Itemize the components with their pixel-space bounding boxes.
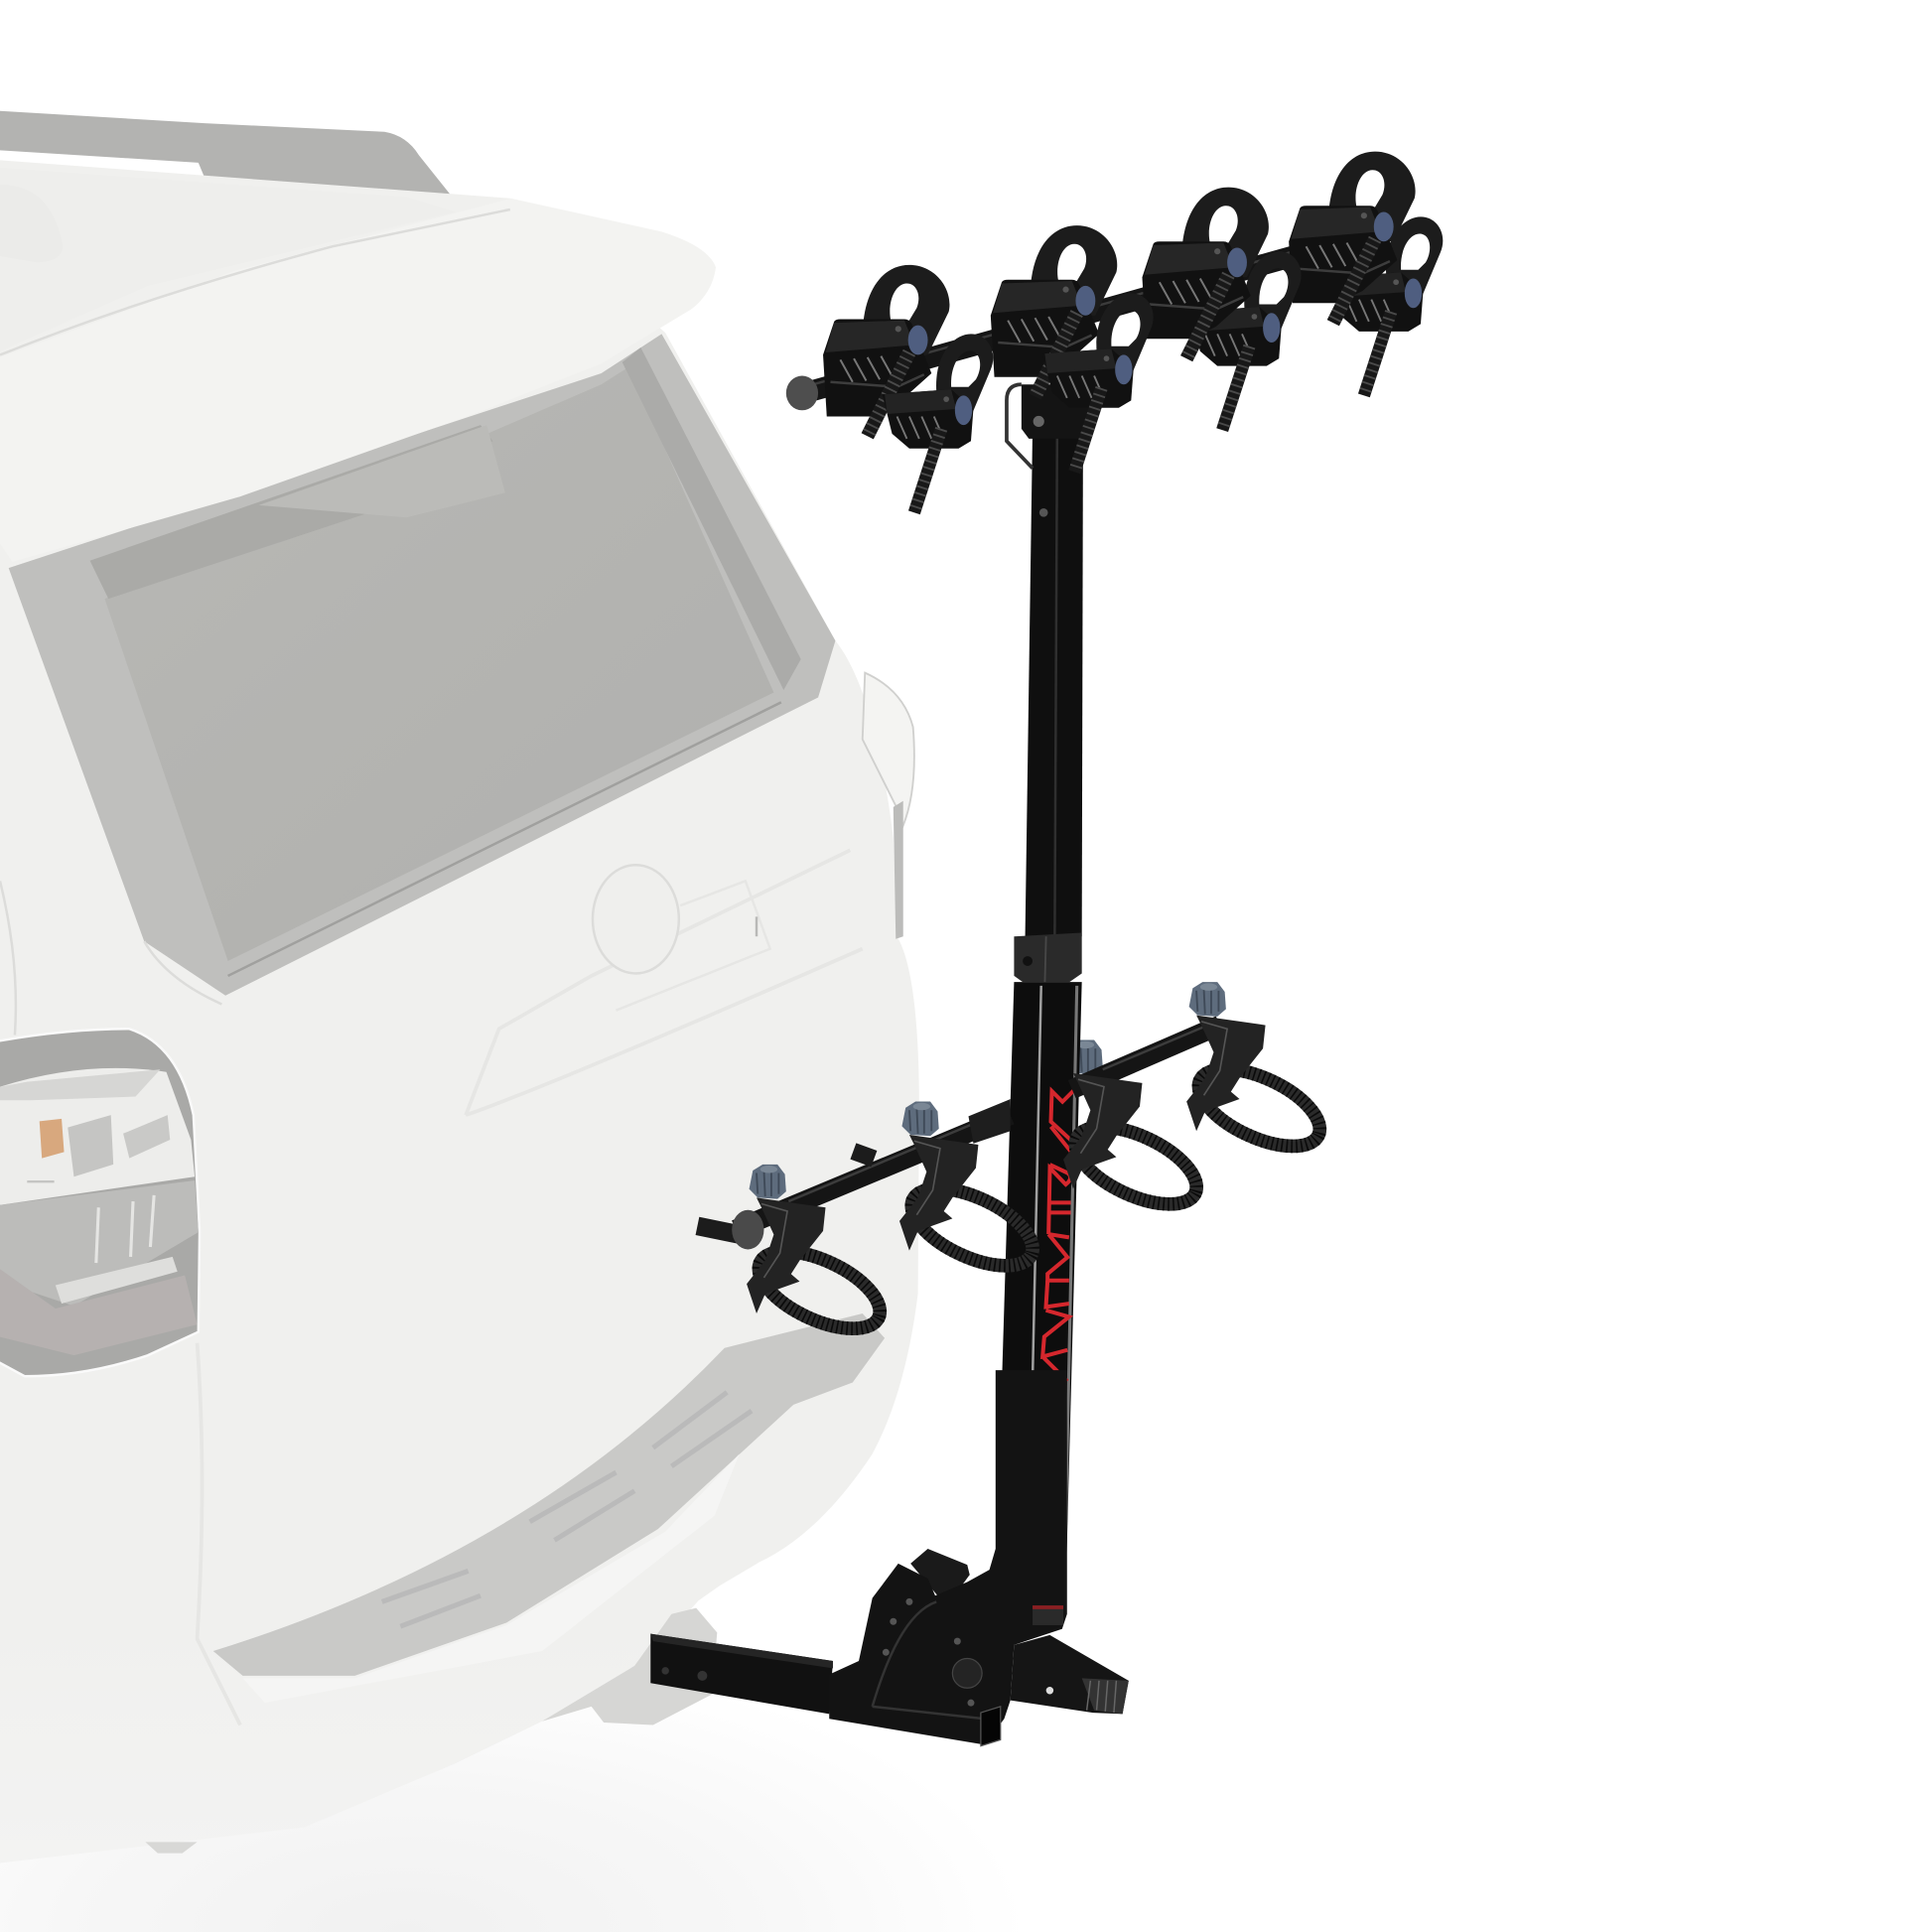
car body <box>0 160 919 1863</box>
rack: tilting base and hitch bar <box>650 1370 1129 1746</box>
upper clamp front 4 <box>1289 152 1416 323</box>
roof glass panel <box>0 168 456 351</box>
lower hold-down cradle 3 <box>1063 1073 1207 1220</box>
upper clamp rear 3 <box>1190 251 1302 430</box>
bumper seam <box>198 1343 240 1725</box>
rear window <box>9 334 835 996</box>
upper clamp rear 1 <box>883 334 993 512</box>
lower hold-down cradle 2 <box>899 1135 1043 1282</box>
hitch tube <box>650 1634 833 1714</box>
hitch receiver <box>542 1608 717 1725</box>
ground shadow <box>0 1601 1232 1932</box>
lower knob behind mast <box>1066 1039 1103 1074</box>
red product logo mark <box>1040 1090 1074 1465</box>
bolts <box>883 1598 982 1707</box>
receiver end <box>981 1707 1001 1746</box>
lower knob 2 <box>901 1102 939 1136</box>
upper clamp rear 4 <box>1332 216 1443 395</box>
bar end cap <box>786 376 818 410</box>
licence recess <box>466 850 863 1115</box>
lower bar end cap <box>732 1210 763 1249</box>
lower mast tube <box>996 982 1082 1589</box>
spoiler crease <box>0 209 510 354</box>
upper clamp front 3 <box>1142 188 1269 358</box>
lower knob 1 <box>750 1165 786 1199</box>
rear pivot ear <box>910 1549 970 1595</box>
liftgate seams <box>0 881 221 1035</box>
liftgate handle and emblem <box>593 865 770 1011</box>
release handle <box>1007 384 1033 469</box>
trim under bumper <box>242 1453 740 1703</box>
roof spoiler <box>0 199 716 562</box>
upper clamp rear 2 <box>1042 293 1154 472</box>
bumper step plate <box>213 1313 885 1676</box>
exhaust tip <box>145 1842 198 1854</box>
roof rail <box>0 111 454 199</box>
bar stub <box>850 1143 877 1167</box>
roof pad <box>0 185 63 262</box>
tail light <box>0 1029 200 1376</box>
mast head <box>1022 384 1094 439</box>
upper clamp front 2 <box>991 225 1117 397</box>
rear side tail lamp <box>863 673 914 939</box>
lower knob 4 <box>1189 982 1226 1017</box>
mast collar <box>1014 932 1082 982</box>
warning label <box>1033 1605 1063 1625</box>
lower hold-down cradle 1 <box>747 1197 892 1344</box>
mast connector <box>968 1099 1011 1144</box>
foot pedal <box>1011 1635 1129 1714</box>
upper mast tube <box>1026 431 1083 936</box>
upper clamp front 1 <box>823 265 949 436</box>
rack: upper cross bar <box>786 251 1307 410</box>
rack: lower cross bar <box>697 1023 1220 1249</box>
pivot plate <box>829 1370 1067 1744</box>
vehicle: white SUV rear <box>0 111 919 1863</box>
rack: telescoping mast <box>996 384 1094 1589</box>
lower hold-down cradle 4 <box>1186 1016 1331 1163</box>
